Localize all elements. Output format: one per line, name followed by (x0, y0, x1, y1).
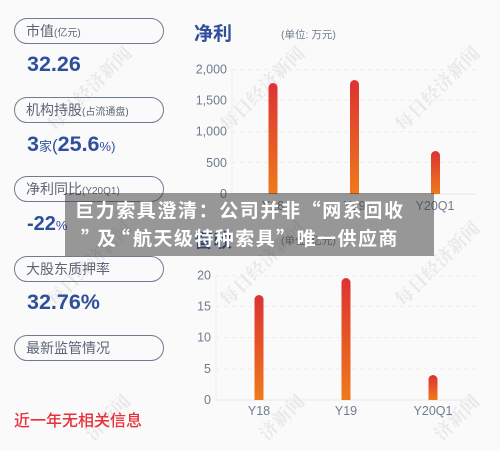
watermarks: 济新闻 (79, 388, 136, 445)
axis labels: 5 (204, 362, 211, 376)
label: net profit change (14, 176, 164, 202)
value: pledge ratio: 32.76% (27, 290, 100, 314)
watermarks: 每日经济新闻 (41, 215, 137, 311)
x labels (262, 199, 455, 213)
label: latest regulation (14, 335, 164, 361)
panel: key metrics (14, 18, 164, 430)
axis labels: 2,000 (196, 62, 227, 76)
x labels: Y20Q1 (416, 199, 455, 213)
x labels: Y19 (343, 199, 366, 213)
watermarks: 每日经济新闻 (41, 40, 137, 136)
axis labels: 1,000 (196, 124, 227, 138)
label: pledge ratio: 大股东质押率 (26, 261, 110, 277)
label: market cap: 市值(亿元) (26, 23, 81, 39)
axis labels: 15 (197, 300, 211, 314)
headline banner: “ (111, 224, 130, 251)
label: net profit change: 净利同比(Y20Q1) (26, 181, 120, 197)
axis labels: 10 (197, 330, 211, 344)
x labels: Y20Q1 (414, 404, 453, 418)
headline banner: 航天级特种索具”唯一供应商 (133, 224, 399, 251)
axis labels: 0 (220, 187, 227, 201)
x labels: Y18 (248, 404, 270, 418)
chart: net profit (194, 23, 476, 213)
headline banner: 及 (97, 224, 116, 251)
axis labels (196, 62, 227, 201)
headline banner: 巨力索具澄清：公司并非“网系回收 (75, 196, 405, 223)
axis labels: 1,500 (196, 94, 227, 108)
x labels (248, 404, 453, 418)
label: pledge ratio (14, 256, 164, 282)
x labels: Y18 (262, 199, 284, 213)
watermarks: 济新闻 (253, 388, 310, 445)
chart heading: 营收 (194, 230, 232, 252)
label: market cap (14, 18, 164, 44)
label: institutional holdings (14, 97, 164, 123)
x labels: Y19 (335, 404, 357, 418)
headline banner (65, 193, 434, 256)
bars (268, 80, 440, 194)
watermarks: 济新闻 (428, 388, 485, 445)
chart heading: 净利 (194, 23, 232, 45)
axis labels: 500 (206, 156, 227, 170)
regulation note: 近一年无相关信息 (14, 413, 142, 430)
unit: (单位: 万元) (281, 28, 336, 41)
watermarks: 每日经济新闻 (389, 40, 485, 136)
value: net profit change: -22% (27, 213, 67, 235)
unit: (单位: 亿元) (281, 234, 336, 247)
watermarks: 每日经济新闻 (214, 215, 310, 311)
value: market cap: 32.26 (27, 52, 81, 76)
chart: revenue (194, 230, 476, 418)
value: institutional holdings: 3家(25.6%) (27, 132, 115, 156)
label: institutional holdings: 机构持股(占流通盘) (26, 102, 129, 118)
watermarks: 每日经济新闻 (389, 215, 485, 311)
bars (254, 278, 438, 400)
axis labels: 0 (204, 393, 211, 407)
watermarks: 每日经济新闻 (214, 40, 310, 136)
axis labels (197, 268, 211, 407)
axis labels: 20 (197, 268, 211, 282)
label: latest regulation: 最新监管情况 (26, 340, 110, 356)
headline banner: ” (81, 224, 100, 251)
